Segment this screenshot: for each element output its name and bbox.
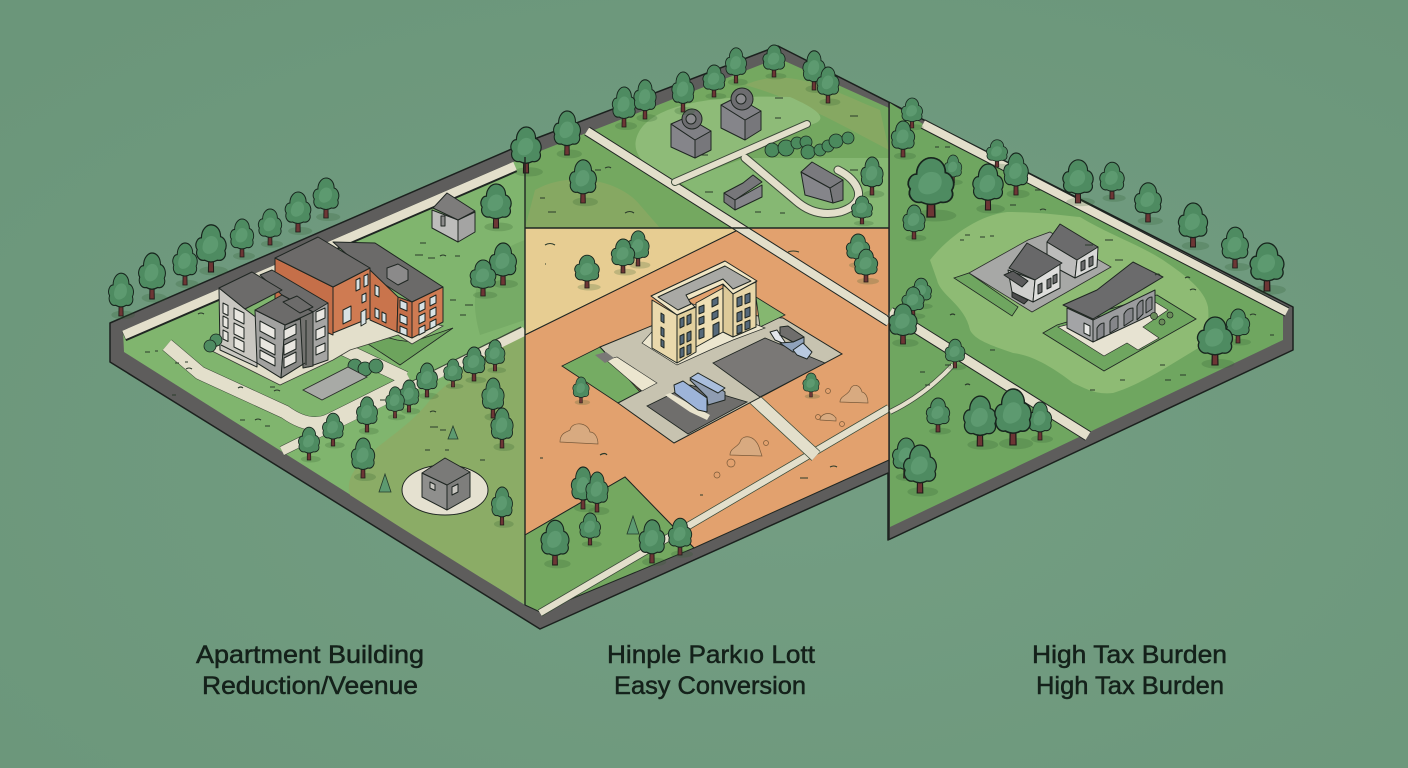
vehicles: left vans — [665, 373, 725, 420]
dark lawn beside building — [365, 328, 453, 365]
caption: tax burden: High Tax Burden — [1032, 641, 1227, 669]
curved path — [890, 365, 953, 412]
light lawn patch — [635, 97, 820, 180]
reflecting pool — [303, 367, 367, 400]
panel: left parcel — [109, 157, 525, 605]
trees: middle parcel — [511, 45, 884, 568]
trees: right parcel — [889, 98, 1286, 497]
top green land — [525, 58, 889, 228]
road network — [167, 331, 525, 451]
plaza with grey building — [402, 458, 488, 515]
lawn left of lot — [954, 273, 1018, 316]
top box building two with dish — [721, 88, 761, 140]
caption: apartment building: Apartment Building — [196, 641, 424, 669]
icon: pines lower — [627, 516, 639, 534]
branch road and drive — [675, 124, 859, 214]
shrubs — [1150, 312, 1173, 325]
building: orange apartment — [275, 237, 443, 338]
grass ticks — [145, 243, 485, 460]
top box building with dish — [671, 109, 711, 158]
panel: right parcel — [889, 98, 1287, 527]
house front — [1004, 243, 1062, 304]
hedge — [204, 334, 383, 376]
dirt mounds — [560, 385, 868, 478]
tan lot — [525, 228, 742, 335]
dirt lane — [750, 395, 816, 456]
trees: left back row — [109, 178, 340, 319]
hall lawn — [1043, 295, 1196, 371]
vehicles: parked truck and car — [770, 326, 812, 359]
orange lot — [525, 228, 889, 548]
building: grey apartment — [219, 270, 328, 378]
parcel dividers — [525, 103, 889, 605]
main road — [587, 131, 889, 322]
small grey house — [801, 162, 843, 203]
right land — [890, 103, 1283, 527]
caption: parking lot: Easy Conversion — [614, 672, 806, 700]
grey lot — [969, 232, 1111, 312]
green lawn by lot — [562, 347, 641, 403]
parking right — [713, 338, 825, 397]
caption: tax burden: High Tax Burden — [1036, 672, 1224, 700]
left parcel land — [123, 157, 525, 605]
back strip — [923, 124, 1287, 312]
light lawn lower — [680, 158, 889, 228]
grey pad — [595, 352, 614, 363]
main road continues — [890, 312, 1088, 436]
lawn behind building — [756, 297, 785, 327]
platform walls — [110, 46, 1293, 629]
panel: middle parcel — [511, 45, 889, 613]
concrete lot — [600, 310, 842, 443]
hall plaza — [1058, 302, 1168, 356]
ticks — [920, 147, 1274, 390]
building plinth — [642, 300, 765, 365]
back cream strip — [124, 166, 515, 336]
light lawn blob — [930, 212, 1208, 393]
parking left — [647, 385, 747, 434]
hedge row — [765, 132, 854, 159]
trees: left parcel — [299, 184, 518, 528]
low grey building — [724, 175, 762, 210]
darker lawn upper right — [475, 240, 525, 335]
green corner lot — [525, 477, 694, 612]
building: hall — [1063, 262, 1163, 342]
olive ground patch — [349, 330, 525, 604]
olive patch — [525, 179, 660, 228]
ticks — [540, 98, 858, 495]
caption: parking lot: Hinple Parkıo Lott — [607, 641, 815, 669]
lower road — [540, 408, 889, 613]
plinth — [210, 300, 443, 385]
icon: small pines — [379, 426, 458, 492]
house back — [1047, 224, 1098, 278]
cream pad — [606, 357, 657, 391]
building: cream apartment — [651, 261, 757, 363]
olive patch upper right — [745, 78, 889, 150]
caption: apartment building: Reduction/Veenue — [202, 672, 418, 700]
icon: shed — [432, 193, 475, 242]
